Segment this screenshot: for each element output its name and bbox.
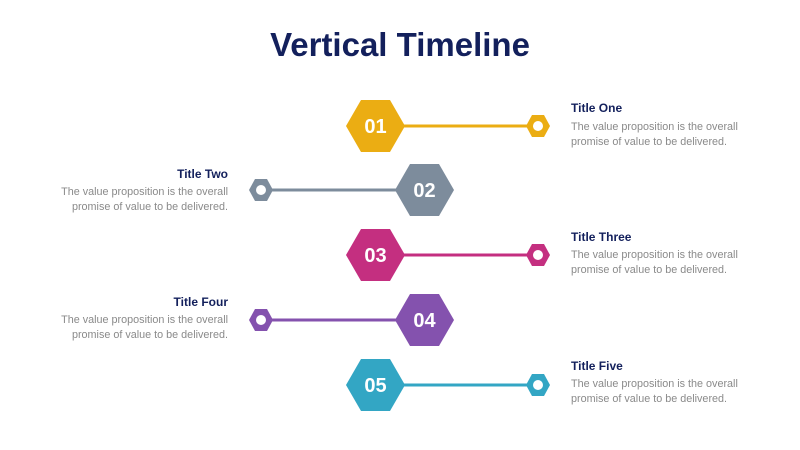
step 01: 01 [364,116,387,138]
text: body one: promise of value to be delivered. [571,136,727,148]
text: body four: promise of value to be delivered. [72,329,228,341]
text: body two: promise of value to be delivered. [72,201,228,213]
text: body three: The value proposition is the overall [571,249,738,261]
text: body two: The value proposition is the overall [61,186,228,198]
text: title two: Title Two [177,167,228,181]
step 03 [346,229,550,281]
text: body one [571,121,738,148]
step 05 [346,359,550,411]
text: body one: The value proposition is the overall [571,121,738,133]
text: body four: The value proposition is the overall [61,314,228,326]
text: body five: The value proposition is the overall [571,378,738,390]
step 02: 02 [413,180,436,202]
text: title four: Title Four [174,295,228,309]
text: title one: Title One [571,101,622,115]
text: body two [61,186,228,213]
step 05: 05 [364,375,387,397]
text: body three [571,249,738,276]
text: title three: Title Three [571,230,631,244]
step 01 [346,100,550,152]
title: Vertical Timeline [270,26,530,63]
step 02 [249,164,454,216]
step 03: 03 [364,245,387,267]
step 04 [249,294,454,346]
text: body four [61,314,228,341]
text: title five: Title Five [571,359,623,373]
step 04: 04 [413,310,436,332]
text: body five [571,378,738,405]
text: body three: promise of value to be delivered. [571,264,727,276]
text: body five: promise of value to be delivered. [571,393,727,405]
